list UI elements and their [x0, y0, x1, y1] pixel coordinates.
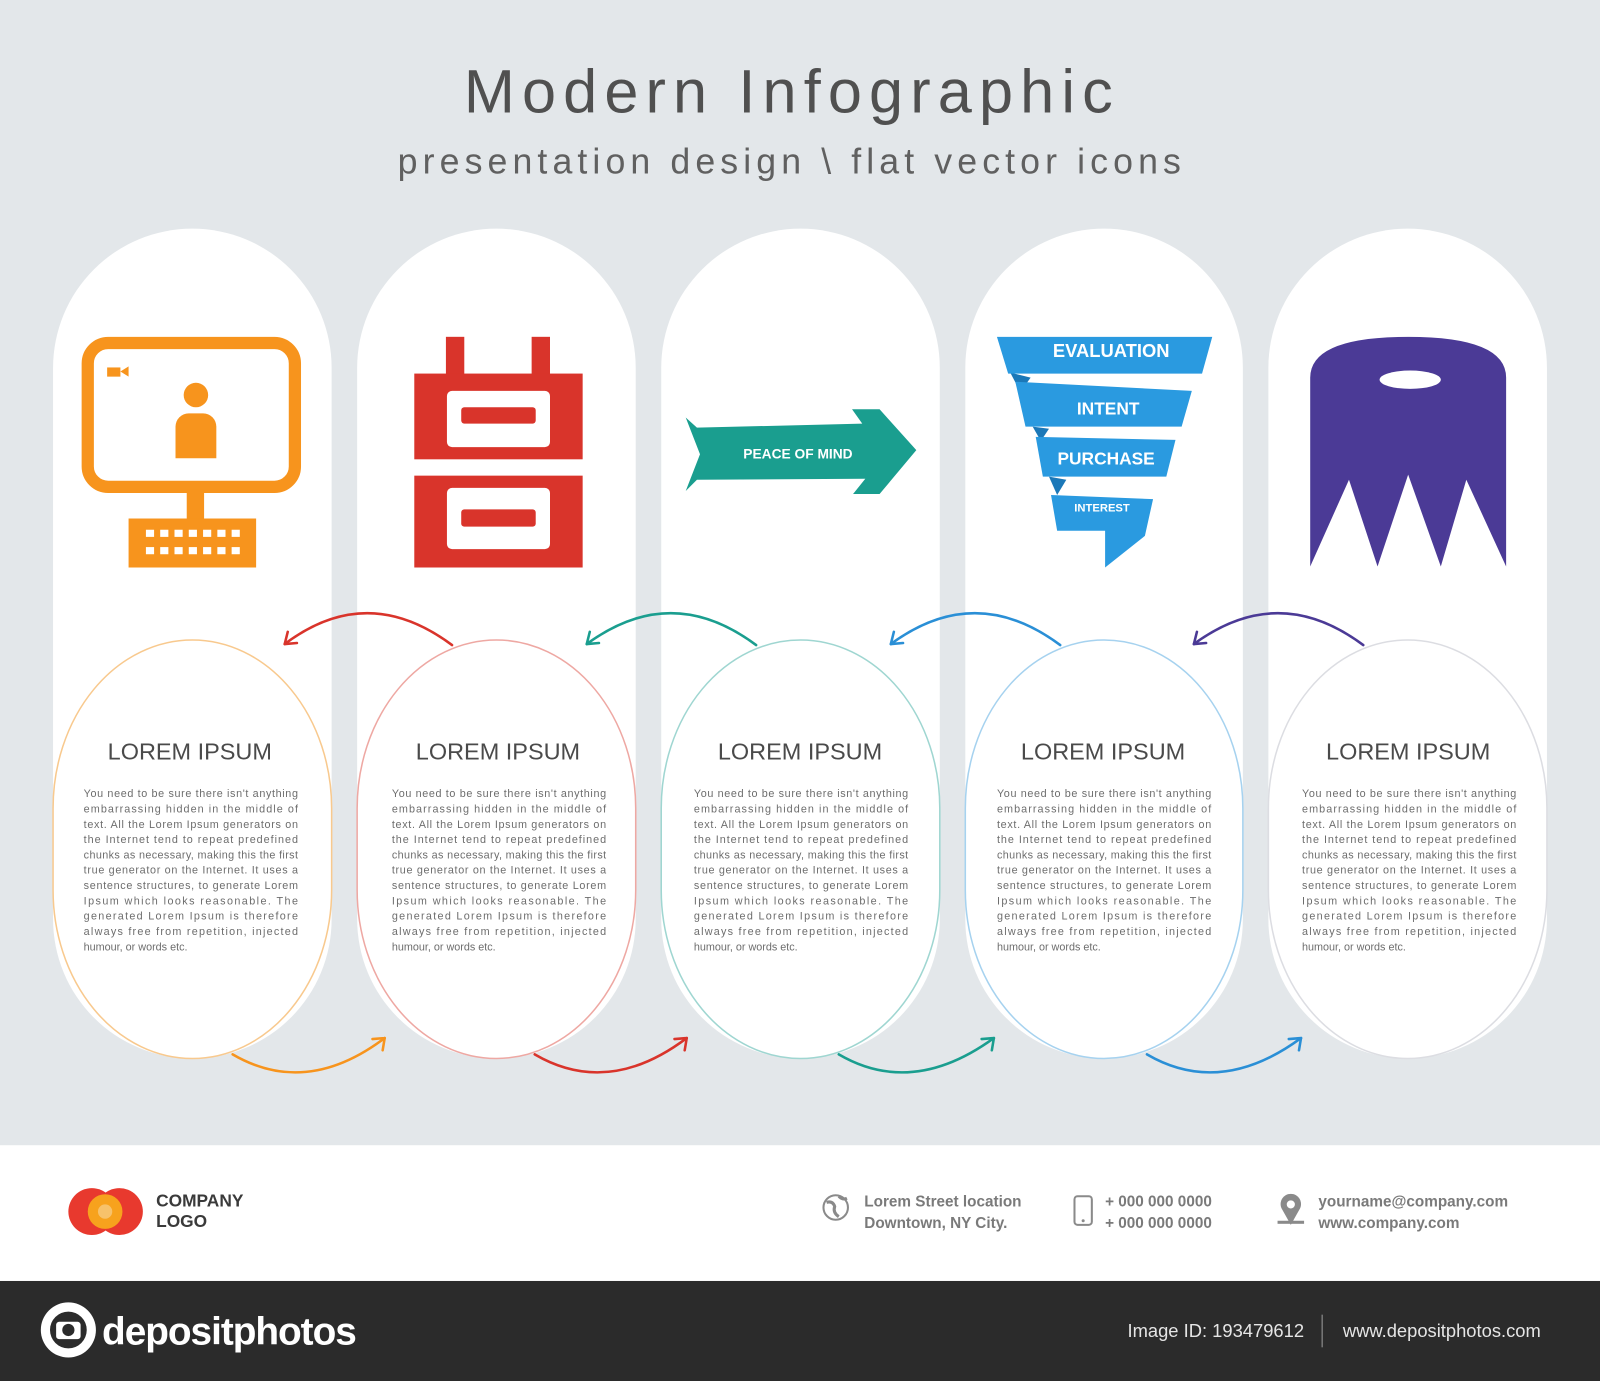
heading: LOREM IPSUM	[1021, 738, 1185, 764]
icon: sales funnel: PURCHASE	[1058, 448, 1155, 468]
company logo: LOGO	[156, 1211, 207, 1231]
company logo	[68, 1188, 244, 1235]
contact: email: www.company.com	[1317, 1215, 1459, 1232]
panel: column 5	[1268, 229, 1547, 1058]
watermark bar: Image ID: 193479612	[1128, 1320, 1304, 1341]
text block	[84, 788, 299, 953]
heading: LOREM IPSUM	[718, 738, 882, 764]
text block	[997, 788, 1212, 953]
icon: tape stump	[1310, 337, 1506, 566]
contact: address: Lorem Street location	[864, 1193, 1022, 1210]
heading: LOREM IPSUM	[1326, 738, 1490, 764]
contact: email	[1278, 1193, 1508, 1232]
contact: email: yourname@company.com	[1318, 1193, 1508, 1210]
watermark bar: depositphotos	[102, 1310, 356, 1353]
subtitle: presentation design \ flat vector icons	[398, 142, 1186, 182]
contact: phone	[1074, 1193, 1212, 1232]
icon: sales funnel: EVALUATION	[1053, 340, 1170, 361]
panel: column 4	[965, 229, 1243, 1058]
panel: column 2	[357, 229, 636, 1058]
arrow: top 3 to 2	[587, 613, 756, 645]
footer band	[0, 1145, 1600, 1281]
text block	[1302, 788, 1517, 953]
arrow: top 5 to 4	[1194, 613, 1363, 645]
panel: column 3	[661, 229, 940, 1058]
arrow: bottom 1 to 2	[233, 1038, 385, 1072]
watermark bar	[0, 1281, 1600, 1381]
icon: arrow peace of mind: PEACE OF MIND	[743, 446, 853, 461]
arrow: bottom 3 to 4	[839, 1038, 994, 1072]
icon: sales funnel: INTEREST	[1074, 502, 1130, 514]
contact: phone: + 000 000 0000	[1105, 1193, 1212, 1210]
arrow: top 2 to 1	[285, 613, 452, 645]
contact: address	[823, 1193, 1022, 1232]
icon: sales funnel	[997, 337, 1212, 568]
company logo: COMPANY	[156, 1190, 244, 1210]
watermark bar: www.depositphotos.com	[1342, 1320, 1541, 1341]
icon: arrow peace of mind	[686, 409, 916, 494]
arrow: bottom 4 to 5	[1147, 1038, 1301, 1072]
title: Modern Infographic	[464, 57, 1120, 125]
text block	[392, 788, 607, 953]
contact: address: Downtown, NY City.	[864, 1215, 1007, 1232]
heading: LOREM IPSUM	[416, 738, 580, 764]
arrow: top 4 to 3	[891, 613, 1060, 645]
panel: column 1	[53, 229, 332, 1058]
icon: computer monitor	[88, 343, 295, 568]
heading: LOREM IPSUM	[108, 738, 272, 764]
icon: sales funnel: INTENT	[1077, 398, 1140, 418]
arrow: bottom 2 to 3	[535, 1038, 687, 1072]
contact: phone: + 000 000 0000	[1105, 1215, 1212, 1232]
text block	[694, 788, 909, 953]
icon: drawers	[414, 337, 583, 568]
